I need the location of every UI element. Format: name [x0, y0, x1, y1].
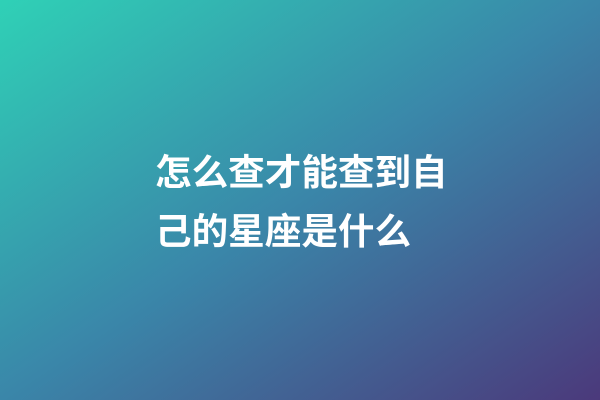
title	[155, 152, 448, 252]
title: 怎么查才能查到自	[155, 152, 448, 193]
title: 己的星座是什么	[155, 210, 411, 252]
